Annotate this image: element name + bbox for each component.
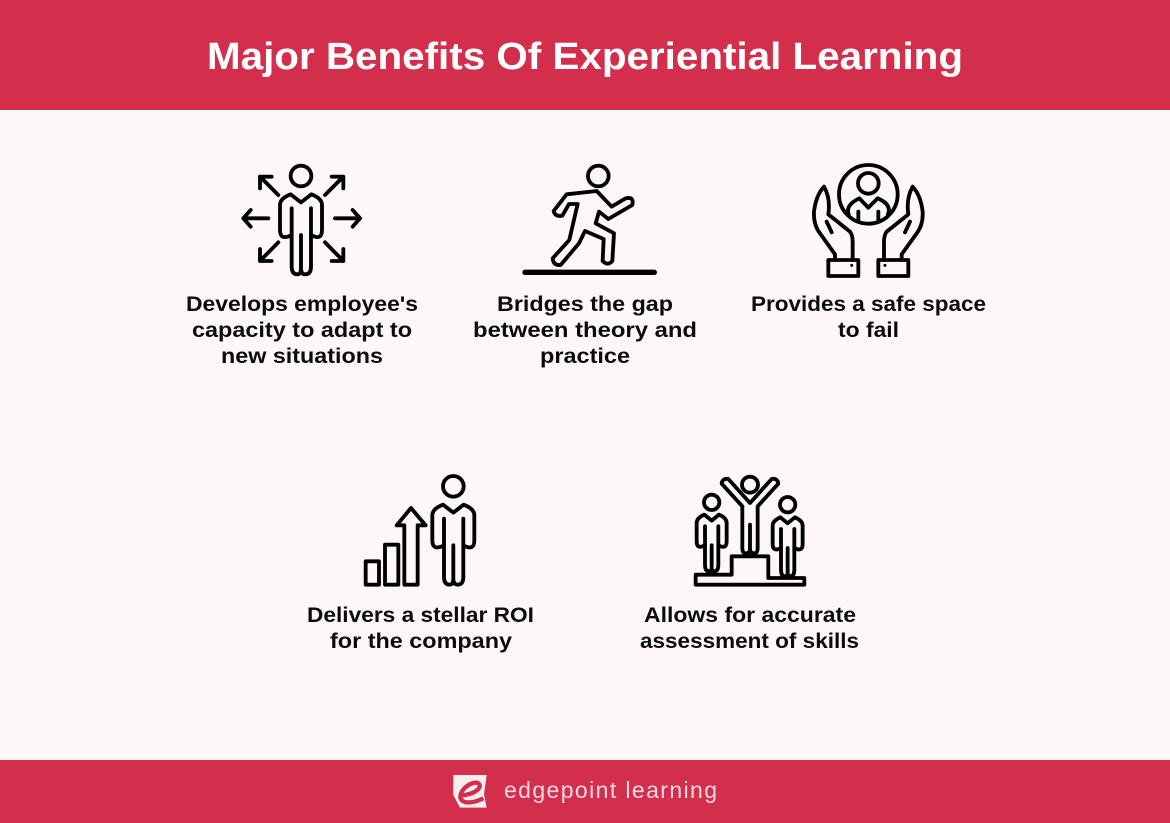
caption — [186, 293, 418, 368]
icon: hands holding person — [814, 165, 923, 276]
caption — [307, 604, 534, 653]
caption: to fail — [838, 319, 899, 342]
caption: Delivers a stellar ROI — [307, 604, 534, 627]
caption — [751, 293, 986, 342]
icon: person with arrows outward — [243, 166, 360, 274]
caption: Provides a safe space — [751, 293, 986, 316]
caption: new situations — [221, 345, 383, 368]
header banner — [0, 0, 1170, 110]
icon: edgepoint logo — [453, 775, 487, 808]
caption: assessment of skills — [640, 630, 859, 653]
caption: between theory and — [473, 319, 697, 342]
panel: safe space to fail — [751, 165, 986, 342]
caption: Bridges the gap — [497, 293, 673, 316]
caption: for the company — [330, 630, 512, 653]
panel: adapt to new situations — [186, 166, 418, 368]
title: Major Benefits Of Experiential Learning — [207, 36, 963, 78]
icon: running person on ground — [525, 166, 654, 272]
caption — [473, 293, 697, 368]
icon: three people on podium — [696, 477, 804, 585]
caption: capacity to adapt to — [192, 319, 412, 342]
caption — [640, 604, 859, 653]
caption: Develops employee's — [186, 293, 418, 316]
panel: theory and practice — [473, 166, 697, 368]
footer banner — [0, 760, 1170, 823]
icon: person beside rising bars — [366, 476, 474, 585]
brand name: edgepoint learning — [504, 777, 717, 803]
panel: stellar ROI — [307, 476, 534, 653]
caption: Allows for accurate — [644, 604, 856, 627]
caption: practice — [540, 345, 630, 368]
panel: accurate assessment — [640, 477, 859, 653]
